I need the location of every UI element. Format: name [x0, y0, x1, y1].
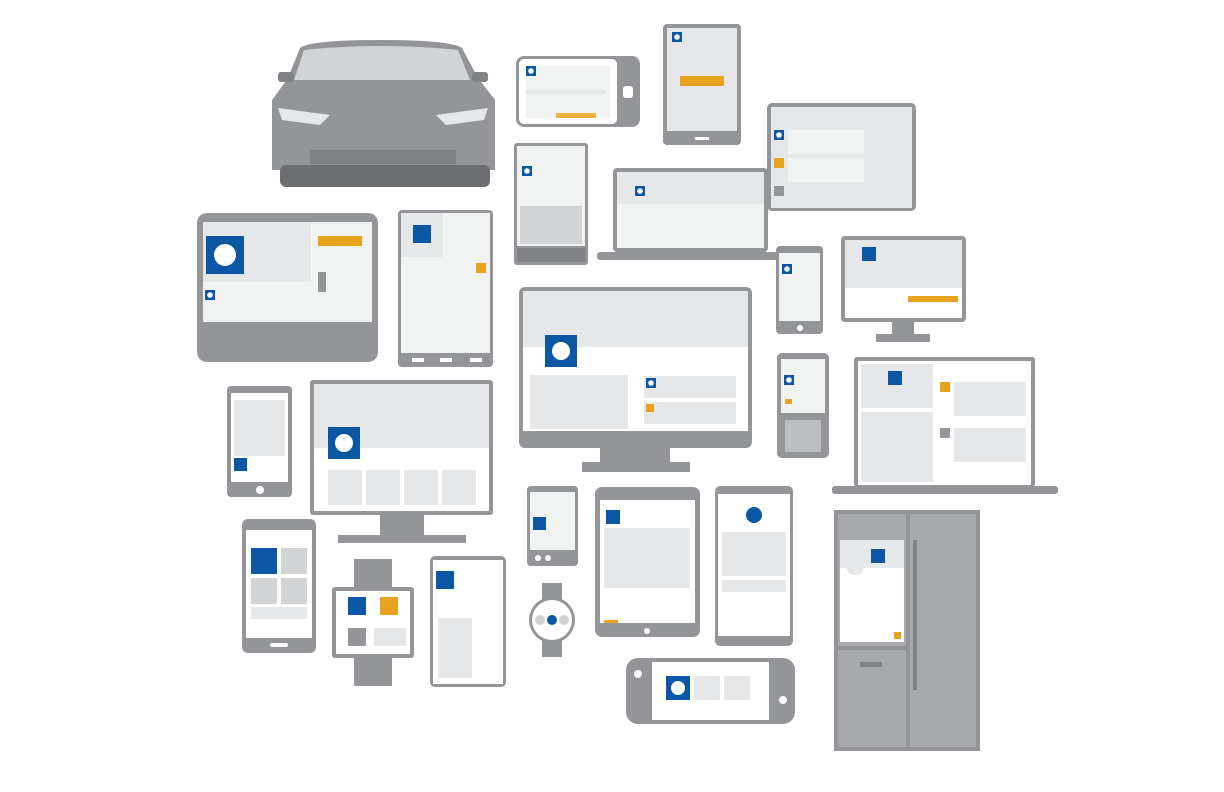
device: small monitor — [841, 236, 966, 342]
device: car — [272, 40, 495, 187]
device: right laptop — [832, 357, 1058, 494]
device: square watch — [332, 559, 414, 686]
device: left monitor — [310, 380, 493, 543]
device: feature phone — [777, 353, 829, 458]
device: tiny phone — [527, 486, 578, 566]
device: fridge — [834, 510, 980, 751]
device: phone tall white — [430, 556, 506, 687]
device: handheld console — [626, 658, 795, 724]
device: big left tablet — [197, 213, 378, 362]
device: small phone — [776, 246, 823, 334]
device: portrait tablet — [398, 210, 493, 367]
device: laptop top — [597, 168, 785, 260]
device: tall phone — [663, 24, 741, 145]
device: landscape phone — [516, 56, 640, 127]
device: blackberry phone — [514, 143, 588, 265]
device: portrait tablet center — [595, 487, 700, 637]
device: left phone — [227, 386, 292, 497]
device: center monitor — [519, 287, 752, 472]
device: tablet top right — [767, 103, 916, 211]
device: phone grid — [242, 519, 316, 653]
device: round watch — [529, 583, 575, 657]
device: phone right — [715, 486, 793, 646]
